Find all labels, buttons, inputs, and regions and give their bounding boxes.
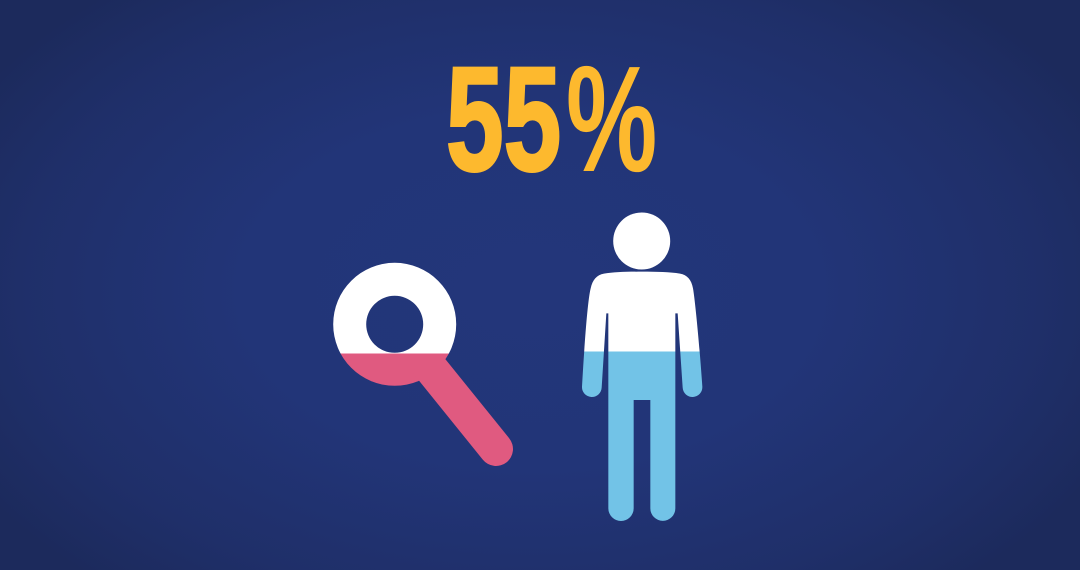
icon: person, 55% filled xyxy=(582,212,702,521)
icon: magnifying glass, 55% filled xyxy=(333,263,496,449)
heading: 55% xyxy=(446,35,657,204)
heading: 55%: 55 xyxy=(446,37,561,202)
person body lower part xyxy=(582,352,702,521)
heading: 55%: % xyxy=(566,35,657,204)
person body upper part xyxy=(584,272,700,352)
person head xyxy=(613,212,670,270)
